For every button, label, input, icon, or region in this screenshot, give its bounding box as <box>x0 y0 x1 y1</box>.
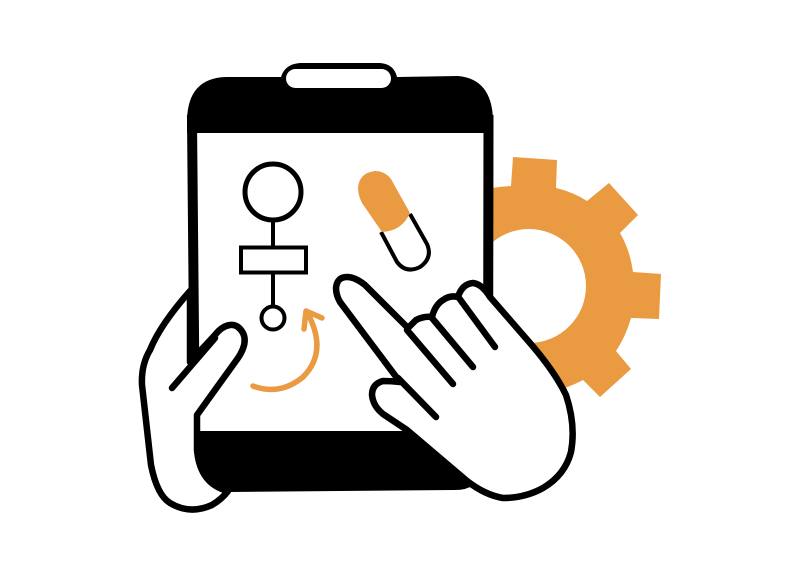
capsule orange half <box>358 171 410 232</box>
tablet top bar <box>187 63 493 133</box>
tablet <box>187 63 493 492</box>
icon: capsule <box>358 171 429 270</box>
tablet bottom bar <box>196 431 484 492</box>
tablet screen and walls <box>192 120 488 440</box>
capsule white half <box>381 214 429 270</box>
left thumb line <box>172 338 215 388</box>
palm of left hand <box>142 291 245 510</box>
left hand <box>142 291 245 510</box>
tablet clip opening <box>286 69 391 88</box>
bottom circle <box>262 306 284 330</box>
right hand outline <box>336 277 573 498</box>
icon: orange gear <box>472 157 661 397</box>
process box <box>241 248 306 272</box>
flowchart icon <box>241 164 306 330</box>
arrow: curved orange <box>253 311 322 389</box>
connector lines <box>271 221 275 306</box>
right hand <box>336 277 573 498</box>
finger lines <box>398 298 495 417</box>
top circle <box>245 164 301 220</box>
